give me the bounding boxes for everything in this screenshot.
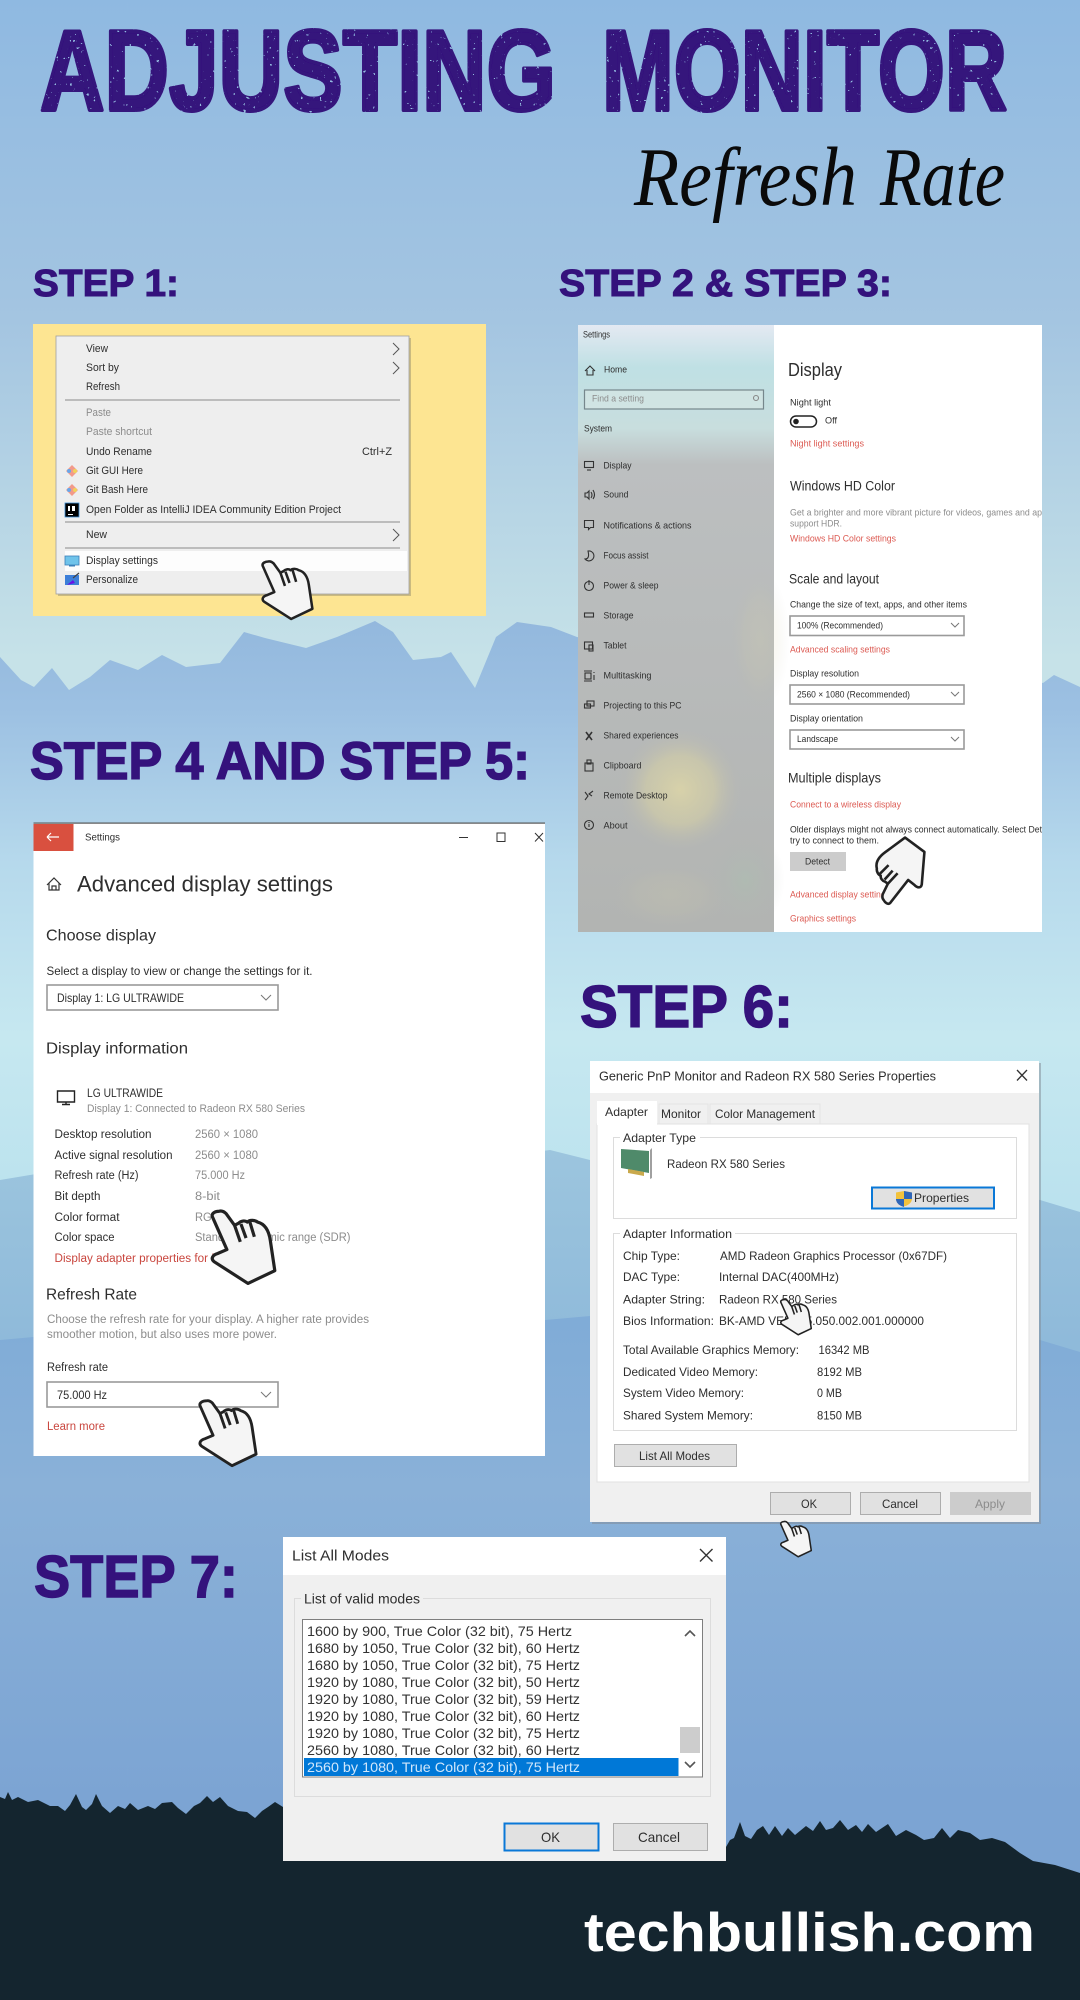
panel: step 1 context menu: Personalize [86,574,138,586]
group: adapter type: Radeon RX 580 Series [667,1157,785,1171]
display information rows: Active signal resolution [54,1150,172,1162]
icon: hand on advanced display settings [862,833,938,905]
search box [584,390,764,409]
panel: step 4 and 5 advanced display settings: LG ULTRAWIDE [87,1086,163,1100]
window controls [459,833,543,842]
display information rows [54,1129,351,1265]
group: adapter information: DAC Type: [623,1270,680,1284]
panel: step 7 list all modes: List All Modes [292,1548,389,1564]
list box of modes: 1920 by 1080, True Color (32 bit), 60 Hertz [307,1708,580,1724]
panel: step 2 and 3 display settings: Windows HD Color settings [790,534,896,544]
list box of modes: 2560 by 1080, True Color (32 bit), 60 Hertz [307,1742,580,1758]
icon: close [1017,1070,1027,1080]
list box of modes: 1920 by 1080, True Color (32 bit), 59 Hertz [307,1691,580,1707]
panel: step 4 and 5 advanced display settings: Refresh Rate [46,1286,137,1304]
icon: display settings [65,556,79,566]
button: cancel [614,1824,708,1850]
toggle [790,416,816,427]
title: Adjusting Monitor [40,8,1007,135]
panel: step 2 and 3 display settings: System [584,424,612,434]
icon: hand on display settings [263,561,312,619]
dropdown: orientation [790,730,964,749]
dropdown: orientation: Landscape [797,734,838,745]
icon: graphics card [621,1148,652,1179]
display information rows: 8-bit [195,1191,221,1203]
panel: step 1 context menu: Paste shortcut [86,426,152,438]
sidebar navigation: Focus assist [604,550,649,562]
panel: step 4 and 5 advanced display settings: Learn more [47,1421,105,1433]
button: list all modes: List All Modes [639,1449,710,1463]
panel: step 2 and 3 display settings: Home [604,364,627,376]
heading: step 7: STEP 7: [34,1544,238,1610]
display information rows: 2560 × 1080 [195,1129,258,1141]
icon: intellij [65,503,79,517]
panel: step 2 and 3 display settings: Advanced display settings [790,890,890,900]
panel: step 1 context menu: Ctrl+Z [362,446,392,458]
panel: step 7 list all modes [283,1537,726,1861]
icon: hand on display adapter properties [212,1211,275,1283]
panel: step 1 context menu: New [86,529,107,541]
panel: step 2 and 3 display settings: Older displays might not always connect automatically. Select Det [790,824,1042,836]
sidebar navigation: Display [604,460,632,472]
panel: step 4 and 5 advanced display settings: Settings [85,832,120,844]
button: cancel: Cancel [882,1497,918,1511]
display information rows: Color space [54,1232,114,1244]
icon: git gui [66,465,78,477]
tabs: Color Management [715,1107,816,1121]
group: adapter information: Total Available Graphics Memory: [623,1343,799,1357]
group: adapter information: Adapter Information [623,1227,732,1241]
panel: step 2 and 3 display settings: Scale and layout [789,572,879,586]
icon: monitor [58,1091,74,1104]
button: list all modes [614,1444,736,1466]
button: ok: OK [801,1497,817,1511]
panel: step 1 context menu: Undo Rename [86,446,152,458]
icon: hand on refresh rate dropdown [200,1401,256,1466]
panel: step 7 list all modes: List of valid modes [304,1592,420,1606]
button: properties [872,1188,994,1208]
panel: step 4 and 5 advanced display settings: Display 1: Connected to Radeon RX 580 Series [87,1103,305,1115]
group: adapter information: Dedicated Video Memory: [623,1365,758,1379]
panel: step 1 context menu: Open Folder as IntelliJ IDEA Community Edition Project [86,504,341,516]
panel: step 1 context menu [33,324,486,616]
icon: home [585,366,595,375]
button: apply [950,1492,1031,1515]
sidebar navigation: Storage [604,610,634,622]
group: adapter information: 8192 MB [817,1365,862,1379]
panel: step 2 and 3 display settings: Connect to a wireless display [790,800,901,810]
list box of modes [302,1620,702,1777]
button: ok: OK [541,1829,561,1845]
heading: step 2 and step 3: STEP 2 & STEP 3: [559,263,892,305]
panel: step 6 adapter properties: Generic PnP Monitor and Radeon RX 580 Series Properties [599,1068,936,1084]
tabs: Adapter [605,1105,648,1119]
button: ok [504,1824,598,1850]
dropdown: scale [790,616,964,636]
group: adapter information: System Video Memory: [623,1386,744,1400]
sidebar navigation: About [604,820,628,832]
title: Adjusting Monitor: ADJUSTING [40,8,556,135]
tabs [597,1101,1029,1482]
group: adapter information [614,1227,1016,1430]
display information rows: 2560 × 1080 [195,1150,258,1162]
panel: step 6 adapter properties [590,1061,1041,1524]
icon: close [700,1549,712,1562]
sidebar navigation: Tablet [604,640,627,652]
subtitle: Refresh Rate: Rate [879,131,1005,224]
panel: step 2 and 3 display settings: Windows HD Color [790,478,895,494]
group: adapter information: Adapter String: [623,1292,705,1306]
panel: step 2 and 3 display settings: Night light [790,398,831,408]
dropdown: refresh rate [47,1382,278,1407]
list box of modes: 1600 by 900, True Color (32 bit), 75 Hertz [307,1623,572,1639]
panel: step 2 and 3 display settings: Settings [583,330,610,340]
sidebar navigation: Clipboard [604,760,642,772]
panel: step 2 and 3 display settings: Change the size of text, apps, and other items [790,600,967,610]
list box of modes: 2560 by 1080, True Color (32 bit), 75 Hertz [307,1759,580,1775]
icon: personalize [65,573,79,585]
group: adapter information: BK-AMD VER015.050.002.001.000000 [719,1314,924,1328]
panel: step 1 context menu: Refresh [86,381,120,393]
dropdown: scale: 100% (Recommended) [797,620,883,632]
group: adapter information: 0 MB [817,1386,842,1400]
panel: step 2 and 3 display settings: try to connect to them. [790,836,879,846]
heading: step 4 and step 5: STEP 4 AND STEP 5: [30,732,530,791]
panel: step 2 and 3 display settings: Graphics settings [790,914,856,924]
display information rows: Desktop resolution [54,1129,152,1141]
panel: step 2 and 3 display settings: Night light settings [790,438,864,450]
subtitle: Refresh Rate: Refresh [633,131,857,224]
sidebar navigation: Sound [604,490,628,500]
panel: step 4 and 5 advanced display settings [34,822,545,1456]
panel: step 4 and 5 advanced display settings: Choose the refresh rate for your display. A higher rate provides [47,1314,369,1326]
group: adapter information: Chip Type: [623,1249,680,1263]
group: adapter type [614,1131,1016,1218]
button: detect: Detect [805,856,830,868]
panel: step 4 and 5 advanced display settings: Select a display to view or change the settings for it. [46,964,312,978]
icon: back arrow [47,833,59,841]
dropdown: resolution [790,685,964,704]
button: cancel [860,1492,940,1514]
panel: step 4 and 5 advanced display settings: Display information [46,1040,188,1058]
list box of modes: 1680 by 1050, True Color (32 bit), 60 Hertz [307,1640,580,1656]
panel: step 2 and 3 display settings: Display orientation [790,714,863,724]
display information rows: 75.000 Hz [195,1170,245,1182]
brand: techbullish.com: techbullish.com [584,1901,1035,1963]
display information rows: RGB [195,1212,219,1224]
panel: step 2 and 3 display settings: Advanced scaling settings [790,644,890,656]
display information rows: Refresh rate (Hz) [54,1170,139,1182]
icon: home [47,878,61,890]
panel: step 4 and 5 advanced display settings: smoother motion, but also uses more power. [47,1329,277,1341]
panel: step 4 and 5 advanced display settings: Choose display [46,928,156,944]
panel: step 2 and 3 display settings [578,325,1042,932]
sidebar navigation: Projecting to this PC [604,700,682,712]
subtitle: Refresh Rate [633,131,1005,224]
icon: git bash [66,484,78,496]
panel: step 1 context menu: Sort by [86,362,119,374]
heading: step 6: STEP 6: [580,974,793,1040]
sidebar navigation: Shared experiences [604,730,679,742]
panel: step 1 context menu: Paste [86,407,111,419]
list box of modes: 1680 by 1050, True Color (32 bit), 75 Hertz [307,1657,580,1673]
group: adapter information: 8150 MB [817,1408,862,1422]
button: cancel: Cancel [638,1829,680,1845]
panel: step 1 context menu: Git Bash Here [86,484,148,496]
dropdown: refresh rate: 75.000 Hz [57,1388,107,1402]
sidebar navigation: Power & sleep [604,580,658,592]
sidebar navigation [584,460,692,832]
tabs: Monitor [661,1107,701,1121]
sidebar navigation: Notifications & actions [604,520,692,532]
display information rows: Standard dynamic range (SDR) [195,1232,351,1244]
button: apply: Apply [975,1497,1005,1511]
icon: hand below ok button [781,1521,811,1557]
panel: step 4 and 5 advanced display settings: Refresh rate [47,1362,108,1374]
panel: step 1 context menu: Git GUI Here [86,465,143,477]
list box of modes: 1920 by 1080, True Color (32 bit), 75 Hertz [307,1725,580,1741]
panel: step 2 and 3 display settings: Off [825,416,837,426]
panel: step 2 and 3 display settings: support HDR. [790,518,842,530]
panel: step 1 context menu: View [86,343,108,355]
search box: Find a setting [592,394,644,404]
sidebar navigation: Multitasking [604,670,652,682]
heading: step 1: STEP 1: [33,263,179,305]
group: adapter information: Radeon RX 580 Series [719,1292,837,1306]
panel: step 1 context menu: Display settings [86,555,158,567]
group: adapter information: Shared System Memory: [623,1408,753,1422]
icon: hand on adapter information [781,1299,811,1335]
display information rows: Bit depth [54,1191,100,1203]
group: adapter type: Adapter Type [623,1131,696,1145]
panel: step 2 and 3 display settings: Get a brighter and more vibrant picture for videos, games and ap [790,508,1042,518]
display information rows: Display adapter properties for Display 1 [54,1253,260,1265]
button: detect [790,852,846,871]
panel: step 2 and 3 display settings: Multiple displays [788,770,881,786]
group: adapter information: 16342 MB [818,1343,870,1357]
list box of modes: 1920 by 1080, True Color (32 bit), 50 Hertz [307,1674,580,1690]
sidebar navigation: Remote Desktop [604,790,668,802]
display information rows: Color format [54,1212,120,1224]
dropdown: display: Display 1: LG ULTRAWIDE [57,991,184,1005]
dropdown: resolution: 2560 × 1080 (Recommended) [797,690,910,700]
dropdown: display [47,985,278,1010]
group: adapter information: Internal DAC(400MHz) [719,1270,839,1284]
panel: step 2 and 3 display settings: Display [788,360,842,380]
panel: step 2 and 3 display settings: Display resolution [790,668,859,680]
button: properties: Properties [914,1191,969,1205]
group: adapter information: AMD Radeon Graphics Processor (0x67DF) [720,1249,947,1263]
group: adapter information: Bios Information: [623,1314,714,1328]
button: ok [770,1492,850,1514]
panel: step 4 and 5 advanced display settings: Advanced display settings [77,872,333,896]
